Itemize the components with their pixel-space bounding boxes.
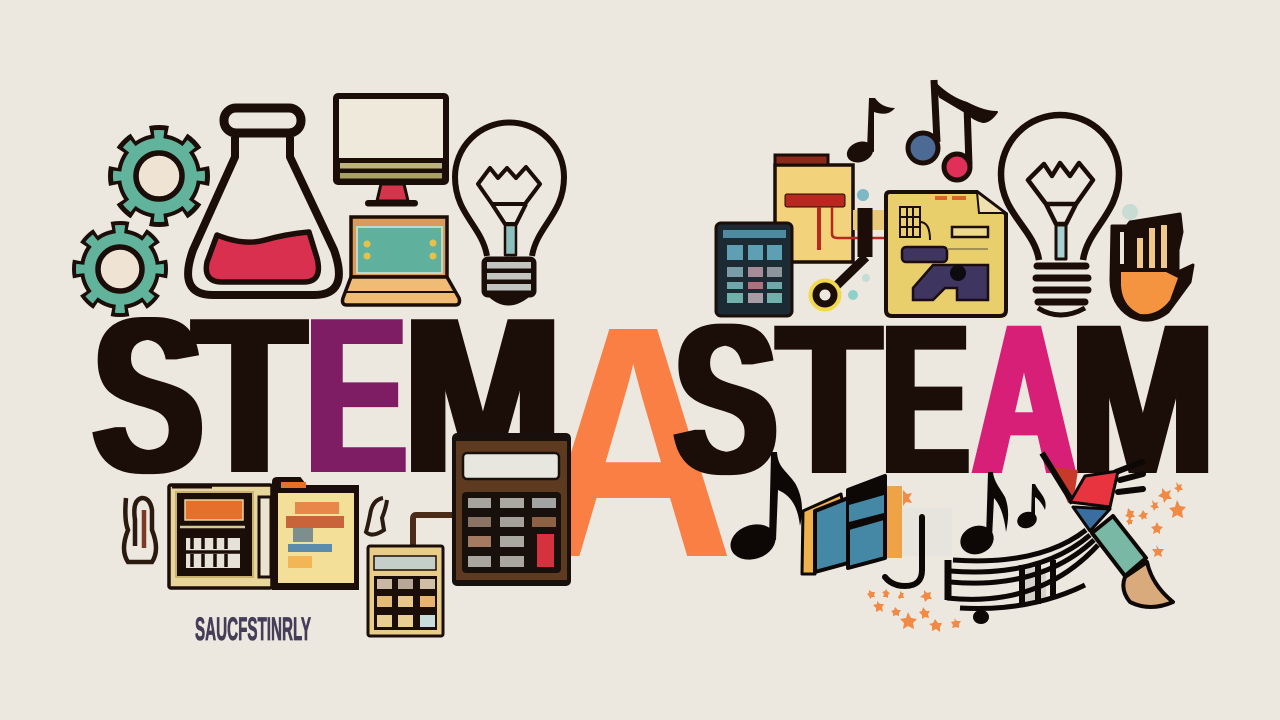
icon: yellow document top right	[775, 155, 886, 262]
icon: large brown calculator	[452, 433, 571, 586]
heading: STEAM: A	[973, 281, 1075, 519]
icon: connector line	[413, 515, 453, 546]
icon: double music note	[908, 80, 997, 180]
icon: lower gear	[80, 229, 160, 309]
decoration: orange splatter left	[867, 589, 961, 632]
heading: STEAM: M	[1070, 281, 1215, 519]
icon: large music note	[726, 452, 802, 565]
decoration: orange splatter right	[1125, 482, 1186, 557]
icon: single music note top	[844, 98, 895, 166]
heading: STEM: M	[403, 271, 562, 519]
icon: laptop	[342, 217, 460, 305]
icon: left paperclip	[124, 498, 156, 562]
icon: upper gear	[117, 134, 201, 218]
icon: flask	[188, 108, 339, 295]
heading: STEM	[92, 271, 562, 520]
icon: connector arm with wheel	[811, 189, 888, 309]
icon: small tan calculator	[368, 546, 443, 636]
icon: raised hand	[1111, 204, 1193, 320]
icon: open book	[802, 476, 912, 574]
decoration: pale ghost patch beside book	[902, 508, 952, 556]
icon: left document	[169, 485, 272, 588]
heading: STEAM: E	[882, 281, 969, 519]
text: SAUCFSTINRLY	[195, 611, 311, 647]
icon: yellow collage document	[273, 478, 358, 589]
icon: hook stroke	[885, 517, 922, 586]
icon: paint brush	[1042, 453, 1173, 607]
icon: right light bulb	[1001, 115, 1119, 315]
icon: small eighth note	[1015, 484, 1046, 531]
icon: eighth note centre	[956, 472, 1008, 559]
icon: blue calculator	[716, 223, 792, 316]
heading: STEAM	[674, 279, 1215, 519]
icon: desktop monitor	[336, 96, 446, 206]
icon: flowing music staff	[947, 530, 1098, 624]
heading: STEAM: T	[777, 279, 881, 518]
icon: right paperclip	[366, 498, 387, 535]
icon: yellow blueprint folder	[886, 192, 1006, 316]
heading: STEM: E	[306, 272, 407, 520]
heading: large letter A orange: A	[532, 258, 735, 626]
heading: STEM: S	[92, 271, 204, 520]
heading: STEAM: S	[674, 280, 777, 519]
heading: STEM: T	[193, 272, 306, 520]
icon: left light bulb	[455, 122, 564, 304]
